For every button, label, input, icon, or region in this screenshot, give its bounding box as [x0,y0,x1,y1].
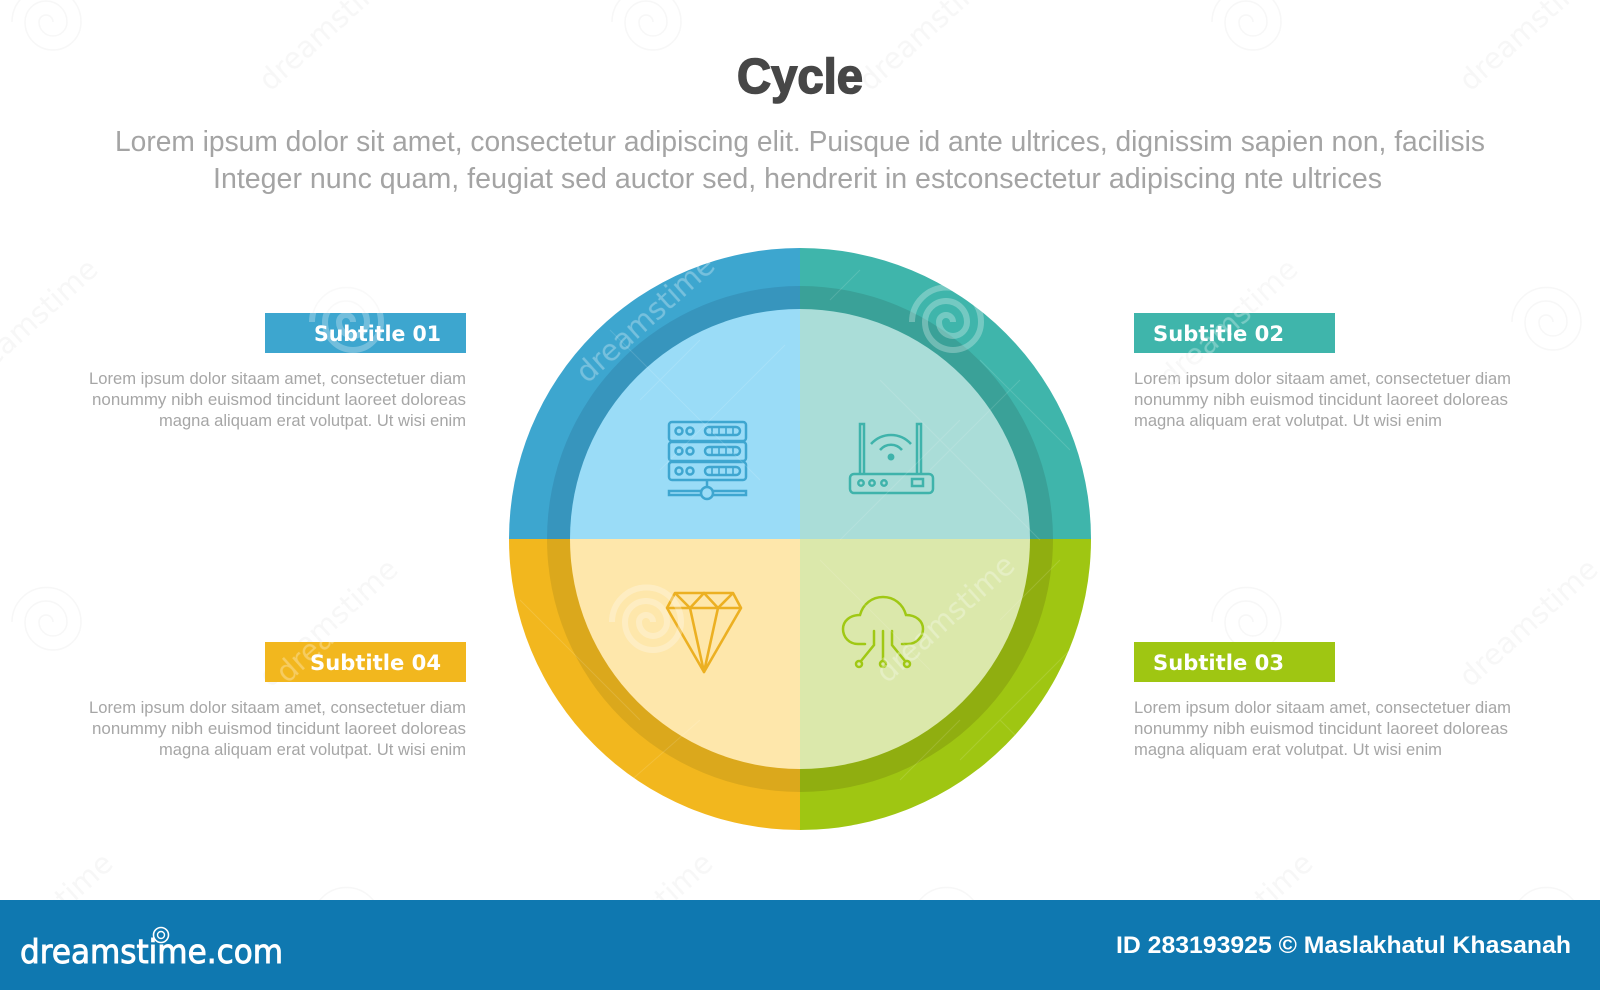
description 03: nonummy nibh euismod tincidunt laoreet doloreas [1134,720,1508,738]
intro text: Lorem ipsum dolor sit amet, consectetur adipiscing elit. Puisque id ante ultrices, dignissim sapien non, facilisis [115,126,1485,158]
description 03: Lorem ipsum dolor sitaam amet, consectetuer diam [1134,699,1511,717]
panel: subtitle 04 [89,642,466,759]
label bar 03 [1134,642,1335,682]
quadrant: yellow [509,539,800,830]
description 02 [1134,370,1511,430]
description 03 [1134,699,1511,759]
intro text: Integer nunc quam, feugiat sed auctor sed, hendrerit in estconsectetur adipiscing nte ultrices [213,163,1382,195]
image id and credit: ID 283193925 © Maslakhatul Khasanah [1116,932,1571,959]
icon: cloud circuit [843,597,923,667]
description 02: magna aliquam erat volutpat. Ut wisi enim [1134,412,1442,430]
background watermark: dreamstime [1167,846,1319,987]
quadrant: green [800,539,1091,830]
description 04: Lorem ipsum dolor sitaam amet, consectetuer diam [89,699,466,717]
label bar 02: Subtitle 02 [1153,322,1284,346]
foreground watermark: dreamstime [869,548,1021,689]
description 02: Lorem ipsum dolor sitaam amet, consectetuer diam [1134,370,1511,388]
label bar 02 [1134,313,1335,353]
foreground watermark [269,248,1306,880]
description 01: nonummy nibh euismod tincidunt laoreet doloreas [92,391,466,409]
background watermark: dreamstime [252,552,404,693]
description 03: magna aliquam erat volutpat. Ut wisi enim [1134,741,1442,759]
icon: server rack [669,422,746,499]
foreground watermark: dreamstime [269,548,421,689]
background watermark: dreamstime [567,846,719,987]
footer logo: dreamstime.com [20,932,283,971]
background watermark: dreamstime [1452,552,1600,693]
label bar 01: Subtitle 01 [314,322,441,346]
label bar 03: Subtitle 03 [1153,651,1284,675]
panel: subtitle 03 [1134,642,1511,759]
description 04 [89,699,466,759]
icon: diamond [667,593,741,672]
description 02: nonummy nibh euismod tincidunt laoreet doloreas [1134,391,1508,409]
footer banner [0,900,1600,990]
label bar 04: Subtitle 04 [310,651,441,675]
icon: wifi router [850,424,933,493]
description 04: nonummy nibh euismod tincidunt laoreet doloreas [92,720,466,738]
description 01: magna aliquam erat volutpat. Ut wisi enim [159,412,466,430]
label bar 01 [265,313,466,353]
quadrant: teal [800,248,1091,539]
panel: subtitle 01 [89,313,466,430]
panel: subtitle 02 [1134,313,1511,430]
label bar 04 [265,642,466,682]
foreground watermark: dreamstime [569,248,721,389]
foreground watermark: dreamstime [1154,252,1306,393]
intro text [115,126,1485,195]
cycle diagram [509,248,1091,830]
description 04: magna aliquam erat volutpat. Ut wisi enim [159,741,466,759]
description 01 [89,370,466,430]
description 01: Lorem ipsum dolor sitaam amet, consectetuer diam [89,370,466,388]
background watermark: dreamstime [1152,252,1304,393]
title: Cycle [737,50,863,104]
quadrant: blue [509,248,800,539]
